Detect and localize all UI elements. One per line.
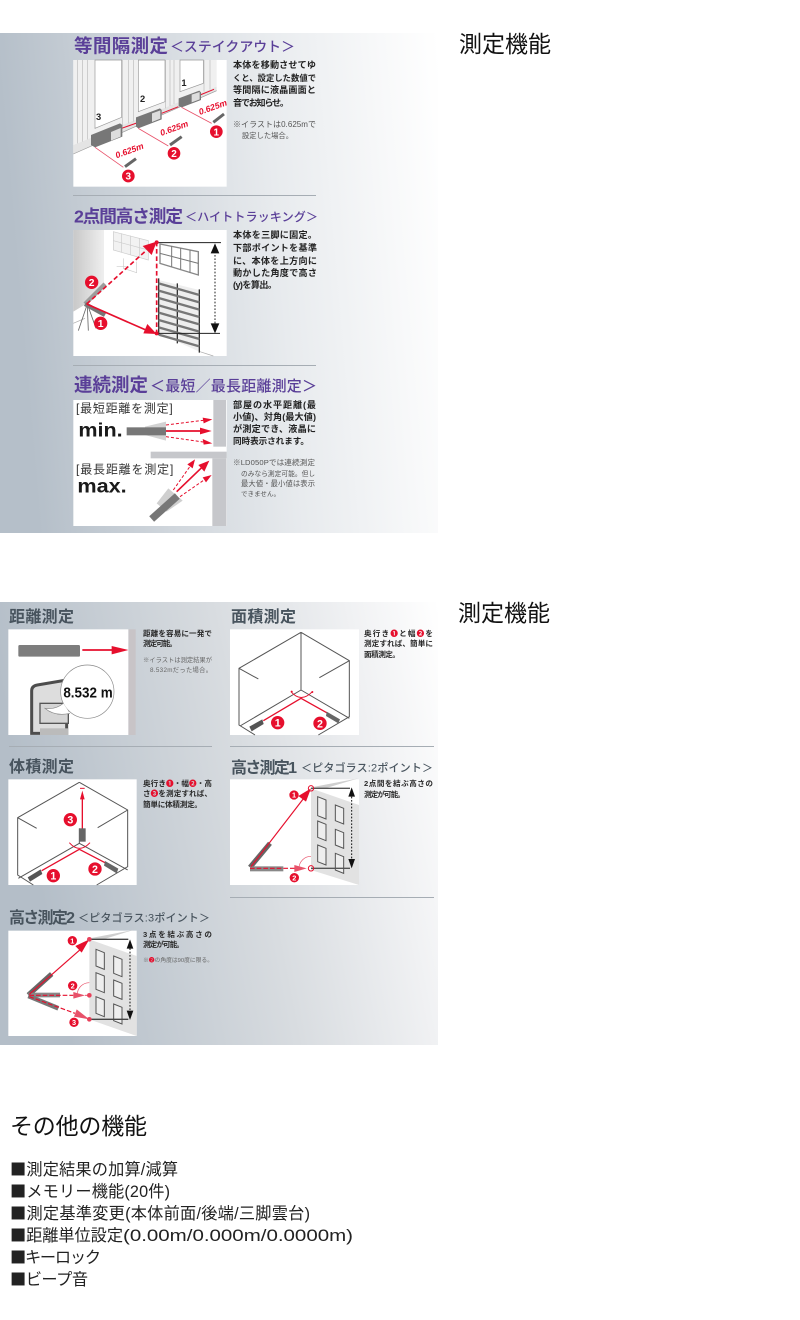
text: volume description: さ❸を測定すれば、 bbox=[143, 788, 212, 798]
heading: volume: 体積測定 bbox=[9, 758, 74, 776]
illustration: min and max distance bbox=[73, 400, 227, 526]
text: stake-out description: くと、設定した数値で bbox=[233, 73, 316, 83]
illustration: volume: 1 bbox=[50, 871, 56, 883]
text: area description: 奥行き❶と幅❷を bbox=[364, 628, 433, 638]
text: continuous measurement description: 同時表示されます。 bbox=[233, 435, 309, 446]
list: other functions: ■メモリー機能(20件) bbox=[10, 1178, 170, 1202]
illustration: stake-out: 0.625m bbox=[159, 118, 190, 138]
heading: 測定機能 (upper): 測定機能 bbox=[459, 31, 551, 57]
text: height tracking description: 動かした角度で高さ bbox=[233, 267, 317, 278]
illustration: volume bbox=[8, 779, 137, 885]
illustration: stake-out: 0.625m bbox=[197, 97, 229, 117]
heading: stake-out: 等間隔測定 bbox=[74, 36, 168, 56]
text: distance description: 8.532mだった場合。 bbox=[150, 665, 212, 674]
text: stake-out description: 本体を移動させてゆ bbox=[233, 59, 316, 70]
text: continuous measurement description: ※LD050Pでは連続測定 bbox=[233, 457, 315, 467]
text: height 2 description: ※❷の角度は90度に限る。 bbox=[143, 956, 213, 964]
illustration: area: 2 bbox=[317, 718, 323, 730]
illustration: stake-out bbox=[73, 60, 229, 187]
text: area description: 測定すれば、簡単に bbox=[364, 638, 433, 648]
illustration: height 2: 2 bbox=[71, 981, 75, 990]
list: other functions: ■ビープ音 bbox=[10, 1266, 88, 1290]
heading: height 2: 高さ測定2 bbox=[9, 908, 75, 927]
list: other functions: ■測定結果の加算/減算 bbox=[10, 1156, 178, 1180]
text: distance description: 測定可能。 bbox=[143, 638, 177, 648]
text: continuous measurement description: 部屋の水平距離(最 bbox=[233, 399, 316, 410]
illustration: area bbox=[230, 629, 359, 735]
text: continuous measurement description bbox=[233, 399, 316, 498]
text: continuous measurement description: 小値)、対角(最大値) bbox=[233, 411, 316, 422]
text: stake-out description bbox=[233, 59, 316, 140]
illustration: height 1 bbox=[230, 778, 359, 885]
text: height 2 description: 3点を結ぶ高さの bbox=[143, 929, 212, 939]
illustration: min and max distance: [最短距離を測定] bbox=[76, 402, 173, 416]
text: volume description bbox=[143, 778, 212, 809]
heading: height 1: 高さ測定1 bbox=[231, 758, 297, 777]
text: height tracking description: (y)を算出。 bbox=[233, 279, 277, 290]
text: volume description: 簡単に体積測定。 bbox=[143, 799, 202, 809]
illustration: height tracking bbox=[73, 230, 227, 356]
illustration: stake-out: 1 bbox=[181, 78, 187, 88]
heading: height tracking bbox=[74, 206, 318, 226]
illustration: min and max distance: [最長距離を測定] bbox=[76, 463, 173, 477]
text: height 1 description: 2点間を結ぶ高さの bbox=[364, 778, 433, 788]
text: stake-out description: 設定した場合。 bbox=[242, 131, 293, 140]
text: height tracking description: 下部ポイントを基準 bbox=[233, 242, 317, 253]
heading: その他の機能: その他の機能 bbox=[10, 1113, 147, 1139]
illustration: stake-out: 1 bbox=[214, 127, 220, 138]
text: continuous measurement description: 最大値・最小値は表示 bbox=[241, 479, 315, 488]
text: volume description: 奥行き❶・幅❷・高 bbox=[143, 778, 212, 788]
heading: continuous measurement bbox=[74, 374, 317, 396]
text: stake-out description: 音でお知らせ。 bbox=[233, 97, 289, 108]
illustration: area: 1 bbox=[275, 718, 281, 730]
illustration: height 1: 1 bbox=[292, 791, 296, 800]
illustration: stake-out: 0.625m bbox=[114, 141, 145, 160]
text: stake-out description: ※イラストは0.625mで bbox=[233, 120, 316, 129]
list: other functions: ■測定基準変更(本体前面/後端/三脚雲台) bbox=[10, 1200, 310, 1224]
illustration: distance bbox=[8, 629, 136, 735]
illustration: min and max distance: min. bbox=[78, 420, 123, 441]
text: continuous measurement description: できません。 bbox=[241, 490, 280, 498]
heading: height 1: ＜ピタゴラス:2ポイント＞ bbox=[301, 760, 433, 774]
heading: height 2: ＜ピタゴラス:3ポイント＞ bbox=[78, 910, 210, 924]
list: other functions: (0.00m/0.000m/0.0000m) bbox=[123, 1227, 353, 1245]
panel: upper measurement functions bbox=[0, 33, 438, 533]
heading: stake-out bbox=[74, 36, 295, 56]
illustration: volume: 3 bbox=[67, 815, 73, 827]
panel: lower measurement functions bbox=[0, 602, 438, 1045]
text: stake-out description: 等間隔に液晶画面と bbox=[233, 84, 316, 95]
heading: 測定機能 (lower): 測定機能 bbox=[458, 600, 550, 626]
illustration: height 2 bbox=[8, 930, 137, 1036]
illustration: stake-out: 3 bbox=[96, 112, 101, 122]
list: other functions: ■距離単位設定 bbox=[10, 1222, 123, 1246]
heading: continuous measurement: 連続測定 bbox=[74, 374, 148, 396]
text: area description bbox=[364, 628, 433, 659]
text: height tracking description bbox=[233, 229, 317, 290]
heading: height 1 bbox=[231, 758, 433, 777]
illustration: volume: 2 bbox=[92, 864, 98, 876]
text: height tracking description: に、本体を上方向に bbox=[233, 255, 317, 266]
illustration: height 2: 3 bbox=[72, 1018, 76, 1027]
illustration: height 2: 1 bbox=[70, 936, 74, 945]
text: height tracking description: 本体を三脚に固定。 bbox=[233, 229, 317, 240]
illustration: height tracking: 2 bbox=[89, 278, 95, 289]
text: height 2 description: 測定が可能。 bbox=[143, 939, 184, 949]
text: continuous measurement description: が測定でき、液晶に bbox=[233, 423, 316, 434]
illustration: min and max distance: max. bbox=[77, 477, 127, 498]
list: other functions bbox=[10, 1156, 353, 1290]
text: continuous measurement description: のみなら測定可能。但し bbox=[241, 469, 315, 478]
text: distance description: 距離を容易に一発で bbox=[143, 628, 212, 638]
illustration: height tracking: 1 bbox=[98, 319, 104, 330]
text: height 1 description bbox=[364, 778, 433, 799]
illustration: distance: 8.532 m bbox=[63, 685, 113, 701]
illustration: stake-out: 3 bbox=[126, 172, 132, 183]
heading: stake-out: ＜ステイクアウト＞ bbox=[170, 38, 295, 54]
illustration: stake-out: 2 bbox=[140, 94, 145, 104]
text: distance description bbox=[143, 628, 213, 674]
heading: continuous measurement: ＜最短／最長距離測定＞ bbox=[150, 378, 317, 395]
heading: distance: 距離測定 bbox=[9, 608, 74, 626]
text: height 2 description bbox=[143, 929, 213, 964]
text: area description: 面積測定。 bbox=[364, 649, 400, 659]
list: other functions: ■キーロック bbox=[10, 1244, 101, 1268]
illustration: stake-out: 2 bbox=[171, 149, 177, 160]
heading: height 2 bbox=[9, 908, 210, 927]
heading: area: 面積測定 bbox=[231, 608, 296, 626]
text: height 1 description: 測定が可能。 bbox=[364, 789, 405, 799]
text: distance description: ※イラストは測定結果が bbox=[143, 655, 213, 664]
illustration: height 1: 2 bbox=[292, 873, 296, 882]
heading: height tracking: 2点間高さ測定 bbox=[74, 206, 183, 226]
heading: height tracking: ＜ハイトトラッキング＞ bbox=[185, 209, 318, 224]
